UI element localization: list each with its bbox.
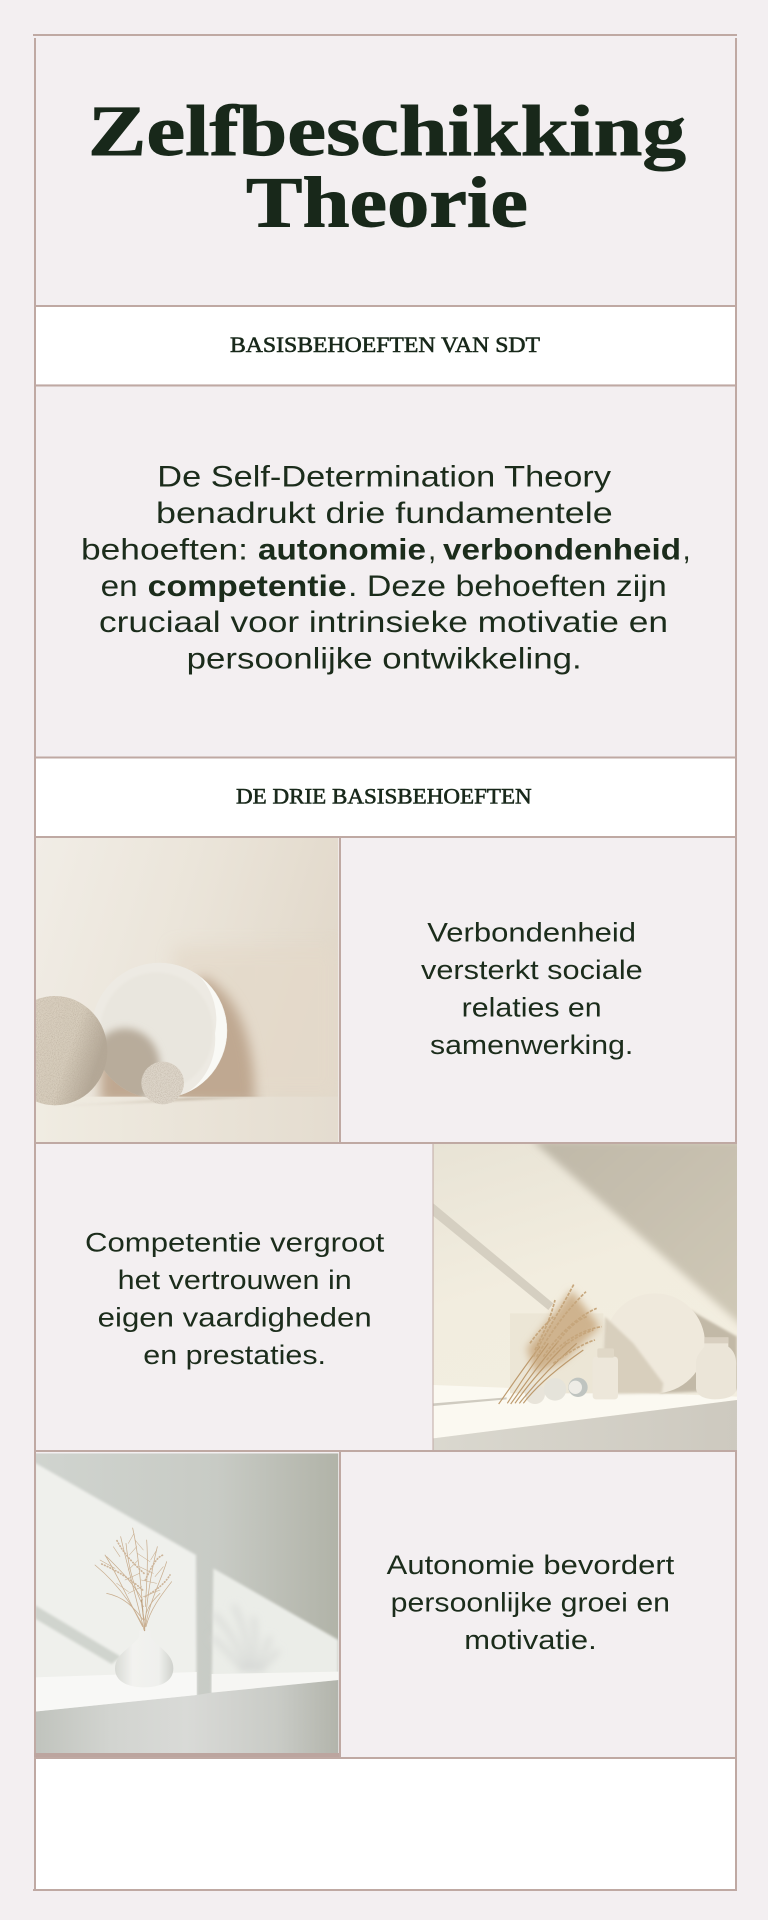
pampas grass [499, 1284, 602, 1404]
panel: title [36, 37, 735, 305]
image: plate and stones still life [36, 838, 338, 1142]
panel: competentie text: en prestaties. [143, 1340, 326, 1370]
intro line 2: benadrukt drie fundamentele [156, 497, 613, 530]
square panel [510, 1313, 603, 1393]
small disc [141, 1062, 184, 1104]
panel: verbondenheid text: samenwerking. [430, 1030, 633, 1060]
heading: de drie basisbehoeften: DE DRIE BASISBEHOEFTEN [236, 783, 532, 808]
panel: competentie text: het vertrouwen in [118, 1265, 352, 1295]
panel: autonomie text: motivatie. [464, 1625, 597, 1655]
intro line 3: verbondenheid [443, 534, 681, 567]
intro line 1: De Self-Determination Theory [157, 461, 611, 494]
wall shadow wedge [532, 1140, 747, 1330]
intro line 4: en [101, 570, 138, 603]
shadow plant [218, 1612, 274, 1672]
diagonal shadow band [35, 1605, 121, 1664]
panel: verbondenheid text: versterkt sociale [421, 955, 643, 985]
diagonal shadow band [433, 1203, 553, 1310]
intro line 3 [81, 534, 691, 567]
intro line 5: cruciaal voor intrinsieke motivatie en [99, 606, 668, 639]
warm wall tint [178, 952, 227, 978]
intro line 4: . Deze behoeften zijn [348, 570, 667, 603]
panel: verbondenheid text: Verbondenheid [427, 918, 636, 948]
intro line 4 [101, 570, 667, 603]
disc shadow [660, 1310, 737, 1393]
heading: basisbehoeften van SDT: BASISBEHOEFTEN VAN SDT [230, 332, 540, 357]
light wedge left [35, 1463, 197, 1712]
plate [104, 963, 228, 1098]
plate shadow [100, 977, 255, 1103]
floor [92, 1096, 302, 1117]
panel: verbondenheid text: relaties en [462, 993, 602, 1023]
disc [661, 1310, 704, 1393]
panel: intro text [36, 386, 735, 757]
intro line 3: behoeften: [81, 534, 248, 567]
image: shelf with pampas and vases [433, 1140, 747, 1450]
large stone [36, 996, 106, 1106]
title line 2: Theorie [246, 162, 528, 242]
intro line 3: , [682, 534, 691, 567]
panel: competentie text: Competentie vergroot [85, 1228, 385, 1258]
shelf front [433, 1400, 737, 1450]
glass spheres [525, 1378, 588, 1404]
panel: autonomie text [341, 1453, 735, 1757]
shelf top [433, 1385, 737, 1438]
panel: heading band drie basisbehoeften [36, 758, 735, 836]
intro line 3: , [428, 534, 436, 567]
light wedge right [212, 1568, 338, 1693]
image: white vase with pampas [35, 1453, 338, 1754]
intro line 4: competentie [148, 570, 347, 603]
panel: autonomie text: persoonlijke groei en [391, 1588, 670, 1618]
lit shelf band [35, 1672, 197, 1712]
pampas plume [95, 1528, 172, 1631]
intro line 6: persoonlijke ontwikkeling. [187, 642, 582, 675]
panel: verbondenheid text [341, 838, 735, 1142]
vase [115, 1650, 174, 1687]
panel: competentie text [36, 1145, 432, 1449]
floor [35, 1680, 338, 1754]
panel: autonomie text: Autonomie bevordert [387, 1550, 675, 1580]
panel: empty footer band [36, 1759, 735, 1889]
bottle [593, 1348, 618, 1399]
panel: heading band basisbehoeften [36, 306, 735, 384]
panel: competentie text: eigen vaardigheden [98, 1303, 372, 1333]
intro line 3: autonomie [258, 534, 426, 567]
title line 1: Zelfbeschikking [88, 91, 686, 171]
vase [696, 1337, 736, 1399]
